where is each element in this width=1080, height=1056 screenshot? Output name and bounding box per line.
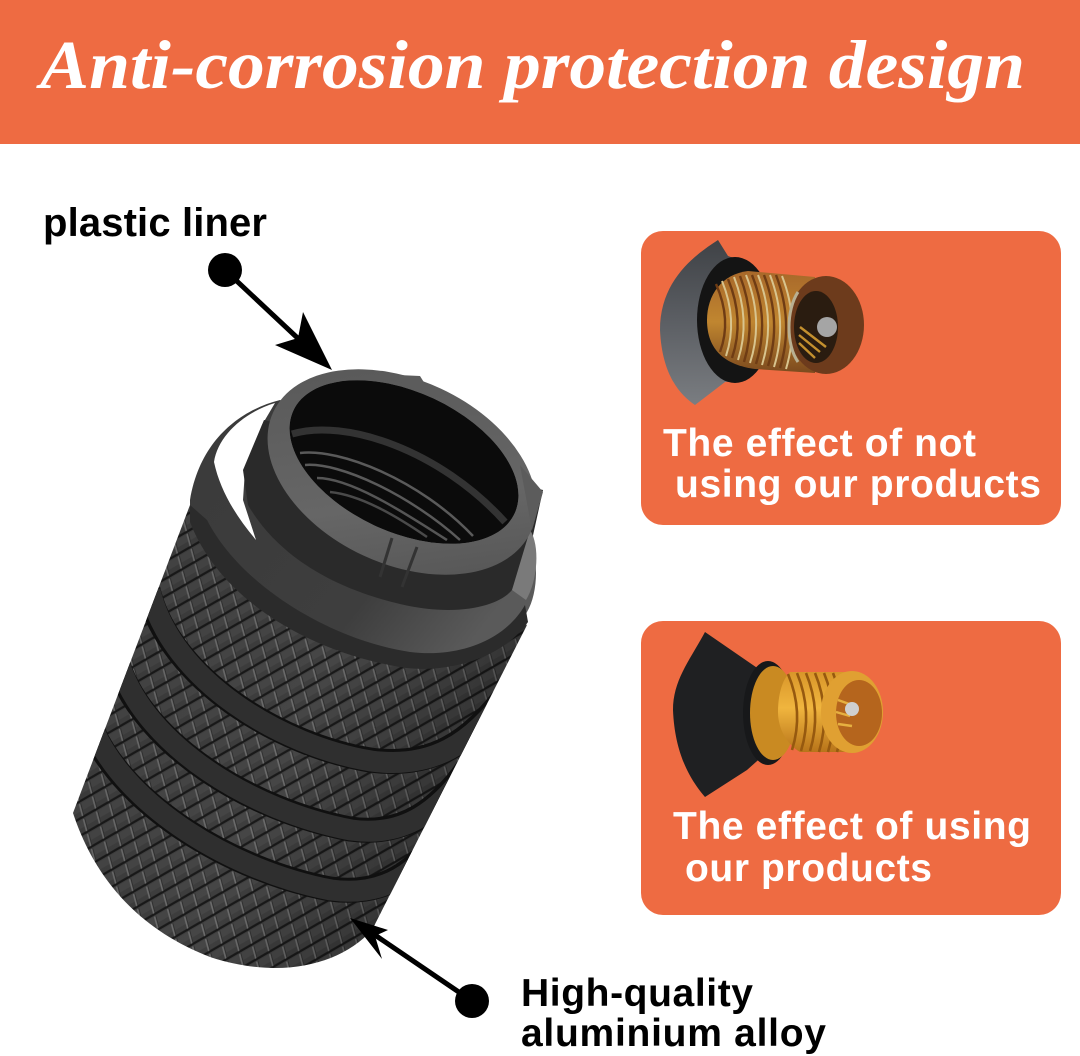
- flange: [190, 400, 536, 667]
- icon: rusty valve: [660, 240, 864, 405]
- liner notch: [380, 538, 417, 587]
- label: plastic liner: plastic liner: [43, 201, 267, 245]
- liner collar: [243, 420, 543, 610]
- liner opening with threads: [290, 380, 518, 544]
- label: high-quality aluminium alloy: [521, 972, 826, 1055]
- liner ring: [234, 329, 570, 615]
- caption: The effect of using: [673, 805, 1031, 848]
- icon: clean valve: [673, 632, 883, 797]
- cap body: [73, 505, 527, 968]
- groove bands: [92, 590, 511, 891]
- panel: effect of not using: using our products: [675, 463, 1041, 506]
- white gap inside flange: [214, 403, 275, 540]
- arrow: aluminium alloy: [350, 918, 489, 1018]
- title: Anti-corrosion protection design: [36, 27, 1025, 103]
- label: high-quality aluminium alloy: aluminium alloy: [521, 1012, 826, 1055]
- panel: effect of using: our products: [685, 847, 932, 890]
- caption: The effect of not: [663, 422, 976, 465]
- product: knurled aluminium valve cap: [73, 369, 543, 968]
- arrow: plastic liner: [208, 253, 332, 370]
- panel: effect of not using: [641, 231, 1061, 525]
- label: high-quality aluminium alloy: High-quality: [521, 972, 753, 1015]
- title banner: [0, 0, 1080, 144]
- panel: effect of using: [641, 621, 1061, 915]
